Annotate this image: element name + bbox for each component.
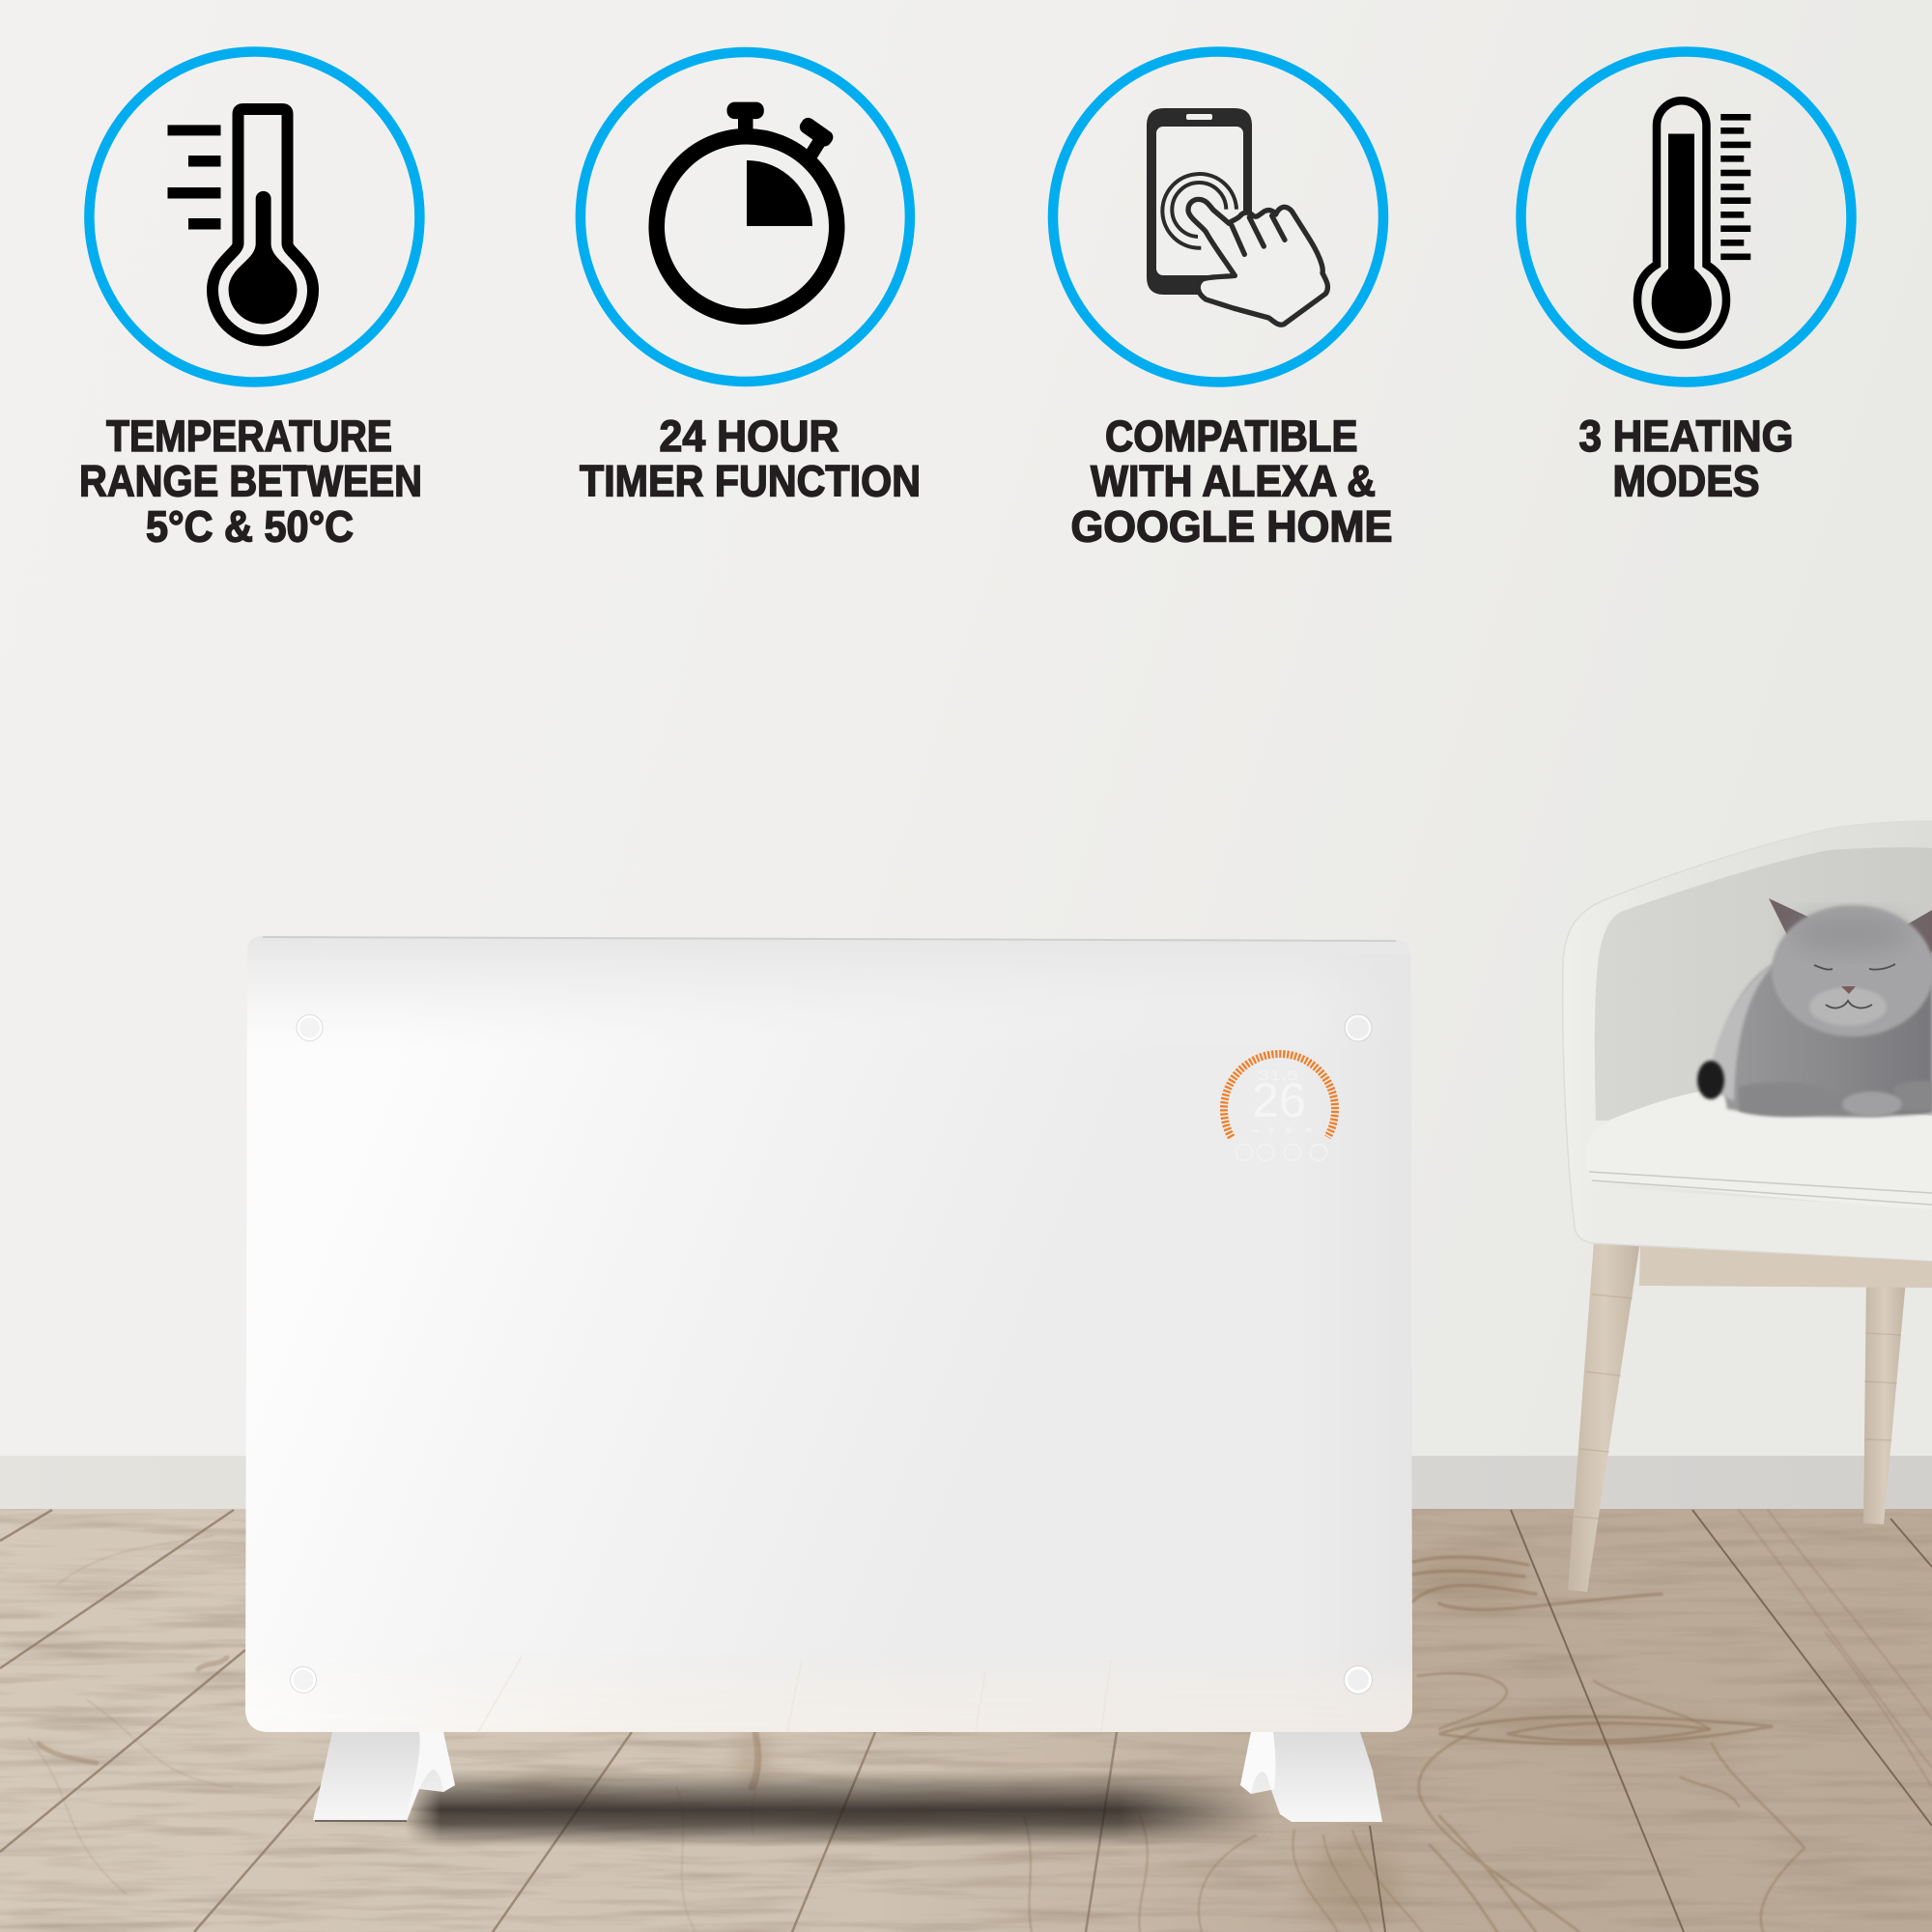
- caption: RANGE BETWEEN: [79, 456, 422, 506]
- cat body: [1722, 927, 1932, 1117]
- panel top edge: [263, 937, 1396, 941]
- glass heater panel: [245, 936, 1412, 1732]
- cat head: [1772, 905, 1932, 1037]
- mounting screw bottom left: [290, 1667, 317, 1692]
- feature: voice assistant compatibility: [1053, 52, 1393, 551]
- caption: [1578, 412, 1793, 506]
- cat nose: [1841, 986, 1856, 994]
- caption: GOOGLE HOME: [1070, 502, 1393, 551]
- skirting board: [0, 1456, 1932, 1510]
- chair lower body: [1592, 1186, 1932, 1261]
- cushion seam: [1589, 1172, 1932, 1205]
- caption: 3 HEATING: [1578, 412, 1793, 461]
- caption: COMPATIBLE: [1105, 412, 1358, 461]
- caption: WITH ALEXA &: [1091, 456, 1376, 506]
- mounting screw bottom right: [1345, 1665, 1372, 1694]
- cat ears: [1769, 898, 1932, 956]
- icon: phone with tapping hand: [1147, 108, 1327, 325]
- chair wood rail: [1639, 1245, 1932, 1288]
- heater foot right: [1240, 1732, 1382, 1822]
- feature: heating modes: [1520, 52, 1851, 506]
- cat face lines: [1814, 964, 1895, 1008]
- thermostat display: [1224, 1054, 1335, 1161]
- chair back panel: [1595, 847, 1932, 1121]
- cat muzzle: [1809, 987, 1887, 1026]
- chair seat cushion: [1586, 1092, 1932, 1211]
- caption: 24 HOUR: [659, 412, 838, 461]
- caption: TEMPERATURE: [106, 412, 392, 461]
- icon ring: [1053, 52, 1383, 383]
- feature: temperature range: [79, 52, 422, 551]
- wood floor: [0, 1509, 1932, 1932]
- icon ring: [581, 52, 910, 382]
- caption: [1070, 412, 1393, 551]
- chair: [1563, 821, 1932, 1592]
- thermostat display: 26: [1252, 1073, 1306, 1127]
- caption: [79, 412, 422, 551]
- cat forelegs: [1739, 1081, 1932, 1117]
- cat paw: [1842, 1092, 1902, 1117]
- sleeping cat: [1697, 898, 1932, 1117]
- caption: TIMER FUNCTION: [580, 456, 921, 506]
- caption: [580, 412, 921, 506]
- icon ring: [89, 52, 419, 383]
- mounting screw top right: [1345, 1014, 1372, 1041]
- heater foot left: [313, 1732, 455, 1821]
- caption: 5°C & 50°C: [146, 502, 354, 551]
- caption: MODES: [1613, 456, 1760, 506]
- cat tail: [1697, 1061, 1724, 1099]
- floor shadow under heater: [406, 1770, 1275, 1847]
- thermostat display: 31.5: [1258, 1067, 1298, 1083]
- icon: thermometer with ticks: [1637, 100, 1750, 345]
- wall background: [0, 0, 1932, 1459]
- feature: timer: [580, 52, 921, 506]
- chair shell: [1563, 821, 1932, 1261]
- icon ring: [1520, 52, 1851, 383]
- panel floor reflection streaks: [478, 1657, 1111, 1732]
- chair back leg: [1863, 1280, 1906, 1524]
- mounting screw top left: [297, 1014, 323, 1041]
- cat back highlight: [1712, 963, 1776, 1101]
- icon: thermometer with scale: [168, 109, 313, 340]
- chair front leg: [1568, 1241, 1640, 1592]
- icon: stopwatch: [657, 102, 837, 317]
